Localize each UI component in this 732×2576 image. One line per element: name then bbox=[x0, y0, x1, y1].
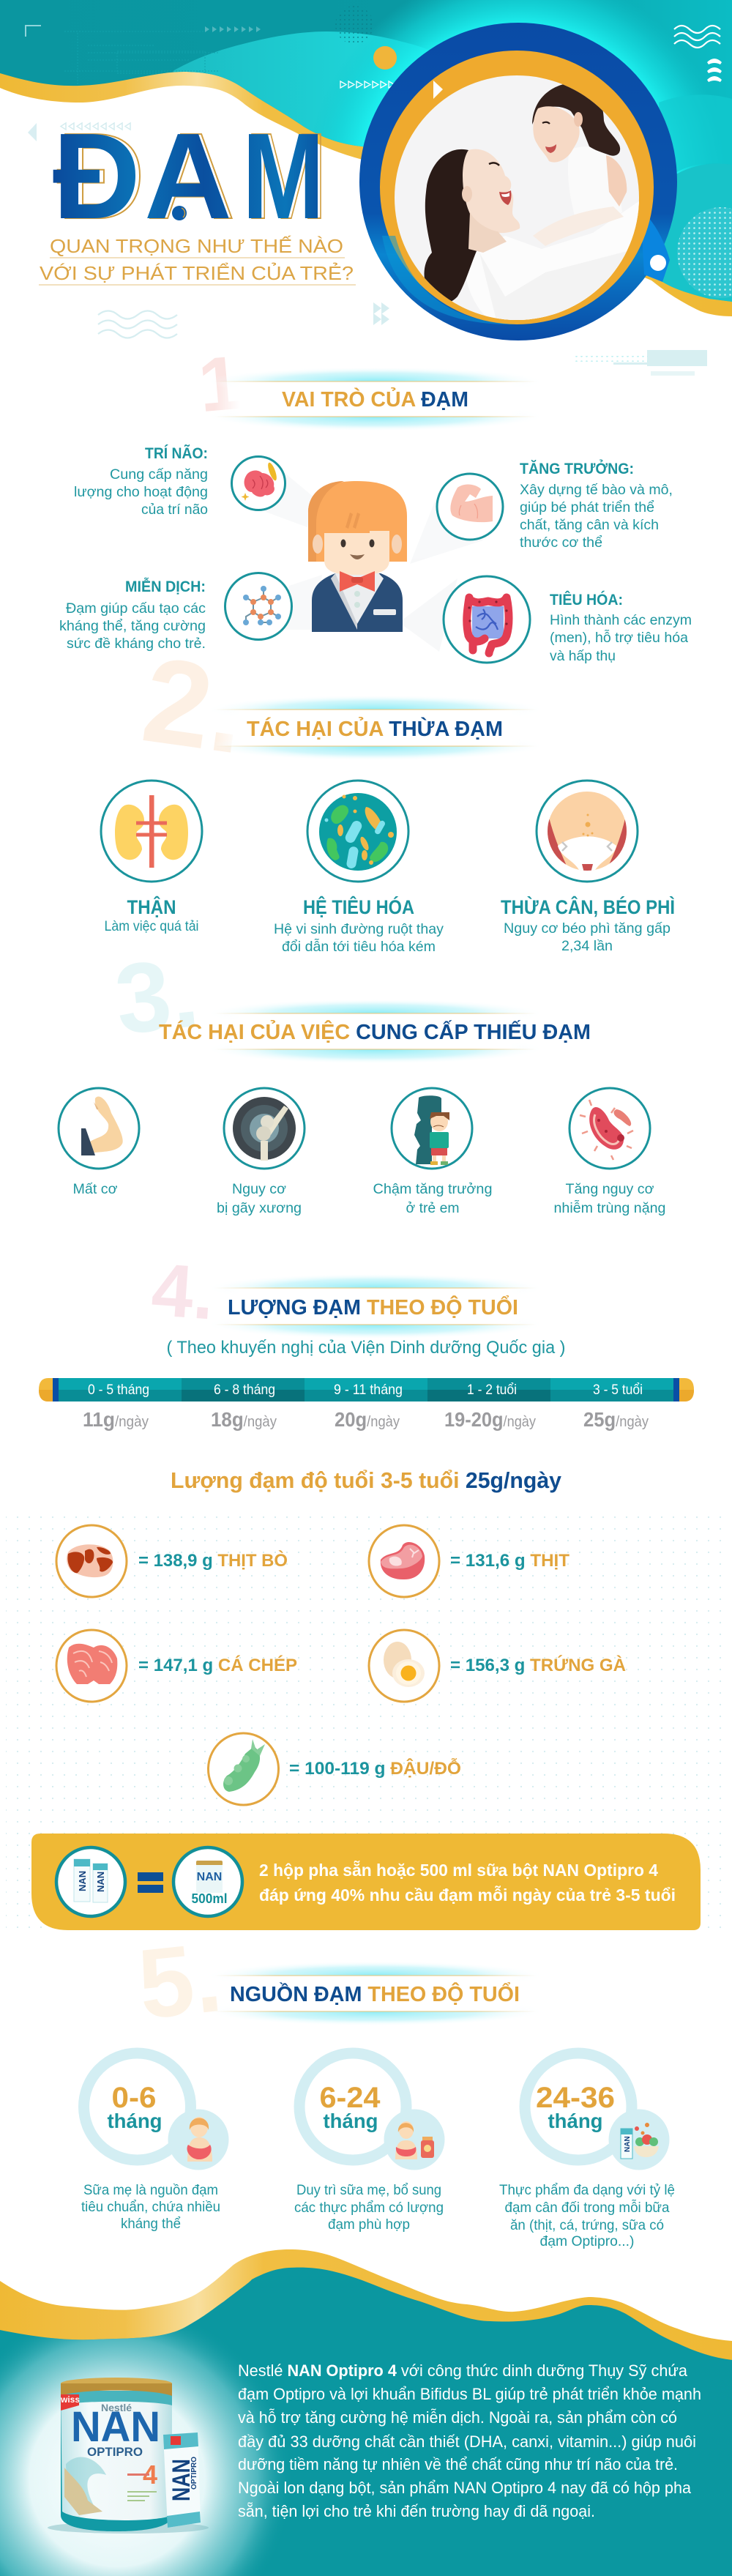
panel: infection bbox=[553, 1088, 666, 1216]
section header: LƯỢNG ĐẠM THEO ĐỘ TUỔI bbox=[206, 1273, 545, 1339]
chart: age timeline bar bbox=[39, 1378, 694, 1431]
title: ĐẠM: Ạ bbox=[144, 108, 232, 245]
panel: pork bbox=[369, 1525, 569, 1597]
icon: bacteria bbox=[319, 793, 397, 871]
product: NAN Optipro carton: NAN bbox=[168, 2459, 195, 2501]
section header: TÁC HẠI CỦA VIỆC CUNG CẤP THIẾU ĐẠM bbox=[159, 999, 591, 1064]
chart values: 11g/ngày bbox=[83, 1408, 149, 1431]
section header: NGUỒN ĐẠM THEO ĐỘ TUỔI bbox=[206, 1961, 545, 2026]
panel: bone fracture: bị gãy xương bbox=[217, 1200, 302, 1216]
chart values: 19-20g/ngày bbox=[444, 1408, 536, 1431]
product: NAN Optipro can: Nestlé bbox=[101, 2402, 132, 2413]
callout: muscle growth: thước cơ thể bbox=[520, 535, 602, 551]
product: NAN Optipro carton: OPTIPRO bbox=[190, 2457, 198, 2490]
icon: white wave lines bbox=[674, 26, 720, 48]
panel: bone fracture: Nguy cơ bbox=[232, 1181, 286, 1197]
text: product description: dưỡng tiềm năng tự nhiên về thể chất cũng như trí não của trẻ. bbox=[238, 2455, 678, 2473]
chart values: 20g/ngày bbox=[335, 1408, 400, 1431]
panel: source 6-24 months: 6-24 bbox=[319, 2082, 381, 2114]
panel: bone fracture bbox=[217, 1088, 305, 1216]
icon: pea pod bbox=[223, 1739, 265, 1792]
callout: molecule immunity: Đạm giúp cấu tạo các bbox=[66, 600, 206, 617]
panel: source 6-24 months bbox=[294, 2053, 445, 2233]
icon: breastfeeding mother bbox=[187, 2117, 212, 2162]
panel: digestive system: đổi dẫn tới tiêu hóa kém bbox=[282, 938, 436, 955]
footer panel: product bbox=[0, 2249, 732, 2576]
icon: weak arm bbox=[81, 1097, 123, 1155]
panel: source 0-6 months: kháng thể bbox=[121, 2216, 181, 2232]
panel: source 6-24 months: đạm phù hợp bbox=[328, 2216, 410, 2233]
panel: digestive system: Hệ vi sinh đường ruột thay bbox=[274, 921, 444, 937]
icon: gold ball bbox=[373, 46, 397, 70]
title: ĐẠM: M bbox=[242, 108, 324, 245]
panel: overweight bbox=[501, 781, 675, 954]
icon: two ready-to-drink boxes: NAN bbox=[77, 1871, 88, 1891]
panel: overweight: 2,34 lần bbox=[561, 938, 613, 954]
panel: slow growth: ở trẻ em bbox=[406, 1200, 460, 1216]
panel: source 24-36 months: 24-36 bbox=[536, 2082, 615, 2114]
number 1: 1. bbox=[195, 338, 266, 428]
callout: digestion: và hấp thụ bbox=[550, 648, 616, 664]
section header: LƯỢNG ĐẠM THEO ĐỘ TUỔI: LƯỢNG ĐẠM THEO ĐỘ TUỔI bbox=[228, 1295, 518, 1319]
panel: source 6-24 months: tháng bbox=[324, 2110, 378, 2132]
panel: source 6-24 months: Duy trì sữa mẹ, bổ sung bbox=[296, 2182, 441, 2198]
number 5: 5. bbox=[133, 1921, 227, 2040]
text: product description: đạm Optipro và lợi khuẩn Bifidus BL giúp trẻ phát triển khỏe mạnh bbox=[238, 2385, 701, 2403]
panel: overweight: Nguy cơ béo phì tăng gấp bbox=[504, 920, 671, 937]
callout: brain: lượng cho hoạt động bbox=[74, 484, 208, 500]
number 3: 3. bbox=[110, 937, 203, 1055]
callout: muscle growth: chất, tăng cân và kích bbox=[520, 517, 659, 533]
panel: infection: Tăng nguy cơ bbox=[565, 1181, 654, 1197]
callout: muscle growth: Xây dựng tế bào và mô, bbox=[520, 482, 673, 498]
panel: carp: = 147,1 g CÁ CHÉP bbox=[138, 1655, 297, 1675]
callout: digestion bbox=[444, 576, 692, 664]
icon: milk can 500ml: NAN bbox=[197, 1871, 222, 1883]
callout: NAN Optipro daily need bbox=[31, 1834, 701, 1930]
icon: milk box and food bowl: NAN bbox=[624, 2136, 632, 2152]
panel: source 0-6 months: 0-6 bbox=[111, 2082, 157, 2114]
panel: carp bbox=[56, 1630, 297, 1702]
panel: slow growth: Chậm tăng trưởng bbox=[373, 1181, 492, 1197]
icon: beef bbox=[67, 1544, 113, 1577]
text: recommendation note: ( Theo khuyến nghị của Viện Dinh dưỡng Quốc gia ) bbox=[167, 1338, 565, 1358]
product: NAN Optipro carton bbox=[163, 2432, 201, 2528]
callout: molecule immunity: sức đề kháng cho trẻ. bbox=[67, 636, 206, 652]
subtitle: QUAN TRỌNG NHƯ THẾ NÀO bbox=[50, 236, 343, 257]
photo: mother and daughter bbox=[425, 83, 644, 326]
callout: digestion: Hình thành các enzym bbox=[550, 612, 692, 628]
icon: milk can 500ml bbox=[173, 1847, 242, 1916]
title: ĐẠM bbox=[53, 133, 321, 220]
title: ĐẠM: Đ bbox=[57, 108, 145, 245]
text: product description: sẵn, tiện lợi cho trẻ khi đến trường hay đi dã ngoại. bbox=[238, 2502, 595, 2520]
product: NAN Optipro can: OPTIPRO bbox=[87, 2445, 143, 2459]
icon: fish steak bbox=[67, 1644, 117, 1684]
heading: daily need age 3-5: Lượng đạm độ tuổi 3-5 tuổi 25g/ngày bbox=[171, 1467, 562, 1493]
icon: milk can 500ml: 500ml bbox=[192, 1891, 227, 1906]
callout: NAN Optipro daily need: 2 hộp pha sẵn hoặc 500 ml sữa bột NAN Optipro 4 bbox=[259, 1860, 658, 1880]
product: NAN Optipro can: NAN bbox=[71, 2403, 160, 2451]
panel: source 24-36 months: đạm cân đối trong mỗi bữa bbox=[505, 2199, 670, 2216]
product: NAN Optipro can bbox=[48, 2378, 209, 2534]
figure: girl in suit bbox=[308, 481, 407, 632]
callout: molecule immunity bbox=[59, 573, 291, 652]
panel: digestive system bbox=[274, 781, 444, 955]
panel: digestive system: HỆ TIÊU HÓA bbox=[303, 896, 414, 918]
panel: kidney: THẬN bbox=[127, 896, 176, 918]
panel: beans: = 100-119 g ĐẬU/ĐỖ bbox=[289, 1757, 461, 1779]
callout: brain: TRÍ NÃO: bbox=[145, 445, 208, 462]
text: product description: Nestlé NAN Optipro 4 với công thức dinh dưỡng Thụy Sỹ chứa bbox=[238, 2361, 688, 2380]
panel: infection: nhiễm trùng nặng bbox=[553, 1199, 666, 1216]
chart values: 18g/ngày bbox=[211, 1408, 277, 1431]
icon: milk box and food bowl bbox=[621, 2123, 659, 2159]
section header: TÁC HẠI CỦA THỪA ĐẠM: TÁC HẠI CỦA THỪA ĐẠM bbox=[247, 716, 503, 741]
panel: source 0-6 months: tháng bbox=[107, 2110, 163, 2132]
callout: digestion: (men), hỗ trợ tiêu hóa bbox=[550, 629, 688, 646]
icon: white dot on ring bbox=[650, 255, 666, 271]
icon: meat bbox=[381, 1542, 425, 1579]
icon: mother and baby food jar bbox=[395, 2121, 434, 2159]
icon: white triangle on ring bbox=[433, 81, 443, 99]
panel: source 0-6 months bbox=[81, 2053, 228, 2232]
hero photo ring bbox=[359, 23, 677, 340]
callout: digestion: TIÊU HÓA: bbox=[550, 591, 623, 608]
callout: brain: của trí não bbox=[141, 502, 208, 518]
chart values bbox=[83, 1408, 649, 1431]
panel: source 24-36 months: Thực phẩm đa dạng với tỷ lệ bbox=[499, 2182, 675, 2198]
number 4: 4. bbox=[149, 1248, 217, 1336]
panel: kidney bbox=[101, 781, 202, 934]
panel: source 24-36 months bbox=[499, 2053, 675, 2249]
panel: kidney: Làm việc quá tải bbox=[104, 918, 199, 934]
title: ĐẠM: Ạ bbox=[147, 108, 235, 245]
number 2: 2. bbox=[135, 631, 254, 779]
chart values: 25g/ngày bbox=[583, 1408, 649, 1431]
panel: source 24-36 months: tháng bbox=[548, 2110, 603, 2132]
callout: muscle growth: TĂNG TRƯỞNG: bbox=[520, 460, 634, 477]
panel: source 24-36 months: đạm Optipro...) bbox=[540, 2233, 634, 2249]
icon: short child and shadow bbox=[414, 1095, 449, 1165]
callout: muscle growth bbox=[437, 460, 673, 551]
icon: two ready-to-drink boxes bbox=[56, 1847, 125, 1916]
child's dress bbox=[600, 157, 621, 206]
callout: brain: Cung cấp năng bbox=[110, 466, 208, 483]
section header: VAI TRÒ CỦA ĐẠM bbox=[206, 367, 545, 431]
callout: molecule immunity: MIỄN DỊCH: bbox=[125, 578, 206, 595]
callout: muscle growth: giúp bé phát triển thể bbox=[520, 499, 654, 515]
icon: equals sign bbox=[138, 1872, 163, 1893]
panel: beef bbox=[56, 1525, 288, 1597]
panel: roles of protein bbox=[59, 445, 692, 664]
section header: TÁC HẠI CỦA THỪA ĐẠM bbox=[206, 695, 545, 761]
icon: broken bone bbox=[233, 1097, 296, 1161]
chart: age timeline bar: 1 - 2 tuổi bbox=[467, 1382, 517, 1398]
icon: two ready-to-drink boxes: NAN bbox=[95, 1872, 106, 1892]
icon: white chevrons bbox=[707, 59, 722, 82]
chart: age timeline bar: 6 - 8 tháng bbox=[214, 1382, 275, 1398]
panel: beans bbox=[208, 1733, 461, 1805]
panel: source 6-24 months: các thực phẩm có lượng bbox=[294, 2200, 444, 2216]
callout: NAN Optipro daily need: đáp ứng 40% nhu cầu đạm mỗi ngày của trẻ 3-5 tuổi bbox=[259, 1885, 676, 1905]
callout: molecule immunity: kháng thể, tăng cường bbox=[59, 618, 206, 634]
text: product description: Ngoài lon dạng bột, sản phẩm NAN Optipro 4 nay đã có hộp pha bbox=[238, 2479, 692, 2497]
panel: source 0-6 months: Sữa mẹ là nguồn đạm bbox=[83, 2182, 218, 2198]
text: product description: và hỗ trợ tăng cường hệ miễn dịch. Ngoài ra, sản phẩm còn có bbox=[238, 2408, 677, 2427]
light cones bbox=[264, 469, 483, 652]
product: NAN Optipro can: 4 bbox=[143, 2460, 157, 2490]
product: NAN Optipro can: wiss bbox=[60, 2394, 80, 2405]
icon: row of white triangles bbox=[340, 81, 403, 88]
child's face bbox=[533, 106, 580, 163]
panel: overweight: THỪA CÂN, BÉO PHÌ bbox=[501, 896, 675, 918]
section header: TÁC HẠI CỦA VIỆC CUNG CẤP THIẾU ĐẠM: TÁC HẠI CỦA VIỆC CUNG CẤP THIẾU ĐẠM bbox=[159, 1019, 591, 1044]
text: product description bbox=[238, 2361, 701, 2520]
panel: egg: = 156,3 g TRỨNG GÀ bbox=[450, 1655, 626, 1675]
icon: boiled egg bbox=[384, 1642, 425, 1687]
subtitle bbox=[39, 236, 356, 286]
title: ĐẠM: M bbox=[245, 108, 327, 245]
callout: brain bbox=[74, 445, 285, 518]
panel: muscle loss: Mất cơ bbox=[73, 1181, 118, 1197]
chart: age timeline bar: 9 - 11 tháng bbox=[334, 1382, 403, 1398]
panel: beef: = 138,9 g THỊT BÒ bbox=[138, 1550, 288, 1571]
icon: bacterium bbox=[580, 1100, 633, 1160]
chart: age timeline bar: 0 - 5 tháng bbox=[88, 1382, 149, 1398]
decorative pale shapes bbox=[28, 123, 707, 376]
text: product description: đầy đủ 33 dưỡng chất cần thiết (DHA, canxi, vitamin...) giúp nuôi bbox=[238, 2432, 696, 2451]
icon: belly bbox=[548, 792, 627, 871]
title: ĐẠM: Đ bbox=[53, 108, 141, 245]
child's arm bbox=[533, 206, 624, 246]
panel: source 24-36 months: ăn (thịt, cá, trứng, sữa có bbox=[510, 2217, 664, 2233]
icon: kidneys bbox=[115, 795, 188, 868]
panel: pork: = 131,6 g THỊT bbox=[450, 1551, 569, 1571]
hero banner bbox=[0, 0, 732, 316]
chart: age timeline bar: 3 - 5 tuổi bbox=[593, 1382, 643, 1398]
panel: egg bbox=[369, 1630, 626, 1702]
section header: VAI TRÒ CỦA ĐẠM: VAI TRÒ CỦA ĐẠM bbox=[282, 387, 468, 412]
panel: muscle loss bbox=[59, 1088, 139, 1197]
subtitle: VỚI SỰ PHÁT TRIỂN CỦA TRẺ? bbox=[40, 262, 354, 284]
child's ponytail and hair bbox=[532, 83, 620, 156]
section header: NGUỒN ĐẠM THEO ĐỘ TUỔI: NGUỒN ĐẠM THEO ĐỘ TUỔI bbox=[230, 1981, 520, 2006]
panel: slow growth bbox=[373, 1088, 492, 1216]
panel: source 0-6 months: tiêu chuẩn, chứa nhiều bbox=[81, 2199, 220, 2215]
mother's hand on child bbox=[621, 187, 627, 203]
